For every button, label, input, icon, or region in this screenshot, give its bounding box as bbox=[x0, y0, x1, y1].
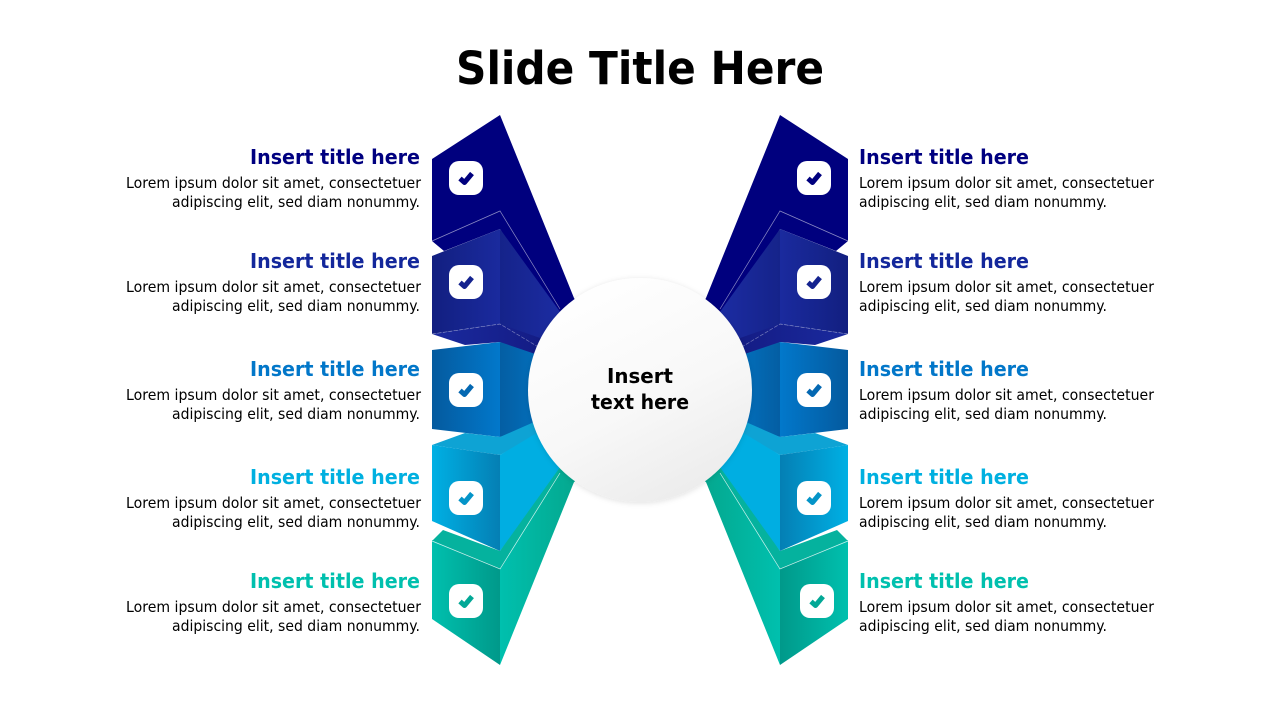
text block: right 1: Insert title here bbox=[859, 145, 1029, 169]
block 3 right blue bbox=[730, 342, 848, 437]
panel: right wing shapes bbox=[680, 115, 848, 665]
text block: left 1: Insert title here bbox=[250, 145, 420, 169]
center circle: text here bbox=[591, 390, 689, 414]
text block: left 2: Insert title here bbox=[250, 249, 420, 273]
text block: left 5: Insert title here bbox=[250, 569, 420, 593]
block 2 right indigo bbox=[714, 229, 848, 368]
block 4 right cyan bbox=[705, 415, 848, 551]
text block: left 4: adipiscing elit, sed diam nonummy. bbox=[172, 513, 420, 531]
text block: right 2: Insert title here bbox=[859, 249, 1029, 273]
text block: right 4: adipiscing elit, sed diam nonummy. bbox=[859, 513, 1107, 531]
text block: left 1 bbox=[126, 145, 422, 211]
text block: right 5: Insert title here bbox=[859, 569, 1029, 593]
text block: right 3: Insert title here bbox=[859, 357, 1029, 381]
icon: check right 4 bbox=[797, 481, 831, 515]
icon: check left 3 bbox=[449, 373, 483, 407]
text block: left 4 bbox=[126, 465, 422, 531]
text block: right 2 bbox=[859, 249, 1155, 315]
block 2 left indigo bbox=[432, 229, 566, 368]
text block: left 3: Insert title here bbox=[250, 357, 420, 381]
text block: left 1: Lorem ipsum dolor sit amet, consectetuer bbox=[126, 174, 422, 192]
text block: left 2 bbox=[126, 249, 422, 315]
block 1 left navy bbox=[432, 115, 600, 340]
text block: right 3 bbox=[859, 357, 1155, 423]
text block: right 1: adipiscing elit, sed diam nonummy. bbox=[859, 193, 1107, 211]
text block: right 1 bbox=[859, 145, 1155, 211]
text block: left 3: adipiscing elit, sed diam nonummy. bbox=[172, 405, 420, 423]
block 5 right teal bbox=[690, 456, 848, 665]
text block: right 5: adipiscing elit, sed diam nonummy. bbox=[859, 617, 1107, 635]
text block: right 3: adipiscing elit, sed diam nonummy. bbox=[859, 405, 1107, 423]
text block: right 4: Insert title here bbox=[859, 465, 1029, 489]
icon: check left 1 bbox=[449, 161, 483, 195]
text block: left 4: Lorem ipsum dolor sit amet, consectetuer bbox=[126, 494, 422, 512]
text block: left 2: adipiscing elit, sed diam nonummy. bbox=[172, 297, 420, 315]
icon: check right 2 bbox=[797, 265, 831, 299]
text block: left 5: adipiscing elit, sed diam nonummy. bbox=[172, 617, 420, 635]
block 4 left cyan bbox=[432, 415, 575, 551]
icon: check right 5 bbox=[800, 584, 834, 618]
icon: check right 1 bbox=[797, 161, 831, 195]
block 5 left teal bbox=[432, 456, 590, 665]
title: Slide Title Here bbox=[456, 42, 824, 95]
center circle bbox=[528, 278, 752, 502]
center circle: Insert bbox=[607, 364, 673, 388]
icon: check left 2 bbox=[449, 265, 483, 299]
panel: left wing shapes bbox=[432, 115, 600, 665]
text block: right 5: Lorem ipsum dolor sit amet, consectetuer bbox=[859, 598, 1155, 616]
text block: left 3 bbox=[126, 357, 422, 423]
text block: left 5: Lorem ipsum dolor sit amet, consectetuer bbox=[126, 598, 422, 616]
text block: left 1: adipiscing elit, sed diam nonummy. bbox=[172, 193, 420, 211]
text block: right 5 bbox=[859, 569, 1155, 635]
icon: check left 4 bbox=[449, 481, 483, 515]
text block: right 2: adipiscing elit, sed diam nonummy. bbox=[859, 297, 1107, 315]
text block: left 3: Lorem ipsum dolor sit amet, consectetuer bbox=[126, 386, 422, 404]
text block: right 4: Lorem ipsum dolor sit amet, consectetuer bbox=[859, 494, 1155, 512]
icon: check left 5 bbox=[449, 584, 483, 618]
text block: right 1: Lorem ipsum dolor sit amet, consectetuer bbox=[859, 174, 1155, 192]
block 1 right navy bbox=[680, 115, 848, 340]
text block: left 2: Lorem ipsum dolor sit amet, consectetuer bbox=[126, 278, 422, 296]
text block: left 5 bbox=[126, 569, 422, 635]
block 3 left blue bbox=[432, 342, 550, 437]
text block: left 4: Insert title here bbox=[250, 465, 420, 489]
text block: right 2: Lorem ipsum dolor sit amet, consectetuer bbox=[859, 278, 1155, 296]
text block: right 3: Lorem ipsum dolor sit amet, consectetuer bbox=[859, 386, 1155, 404]
text block: right 4 bbox=[859, 465, 1155, 531]
icon: check right 3 bbox=[797, 373, 831, 407]
